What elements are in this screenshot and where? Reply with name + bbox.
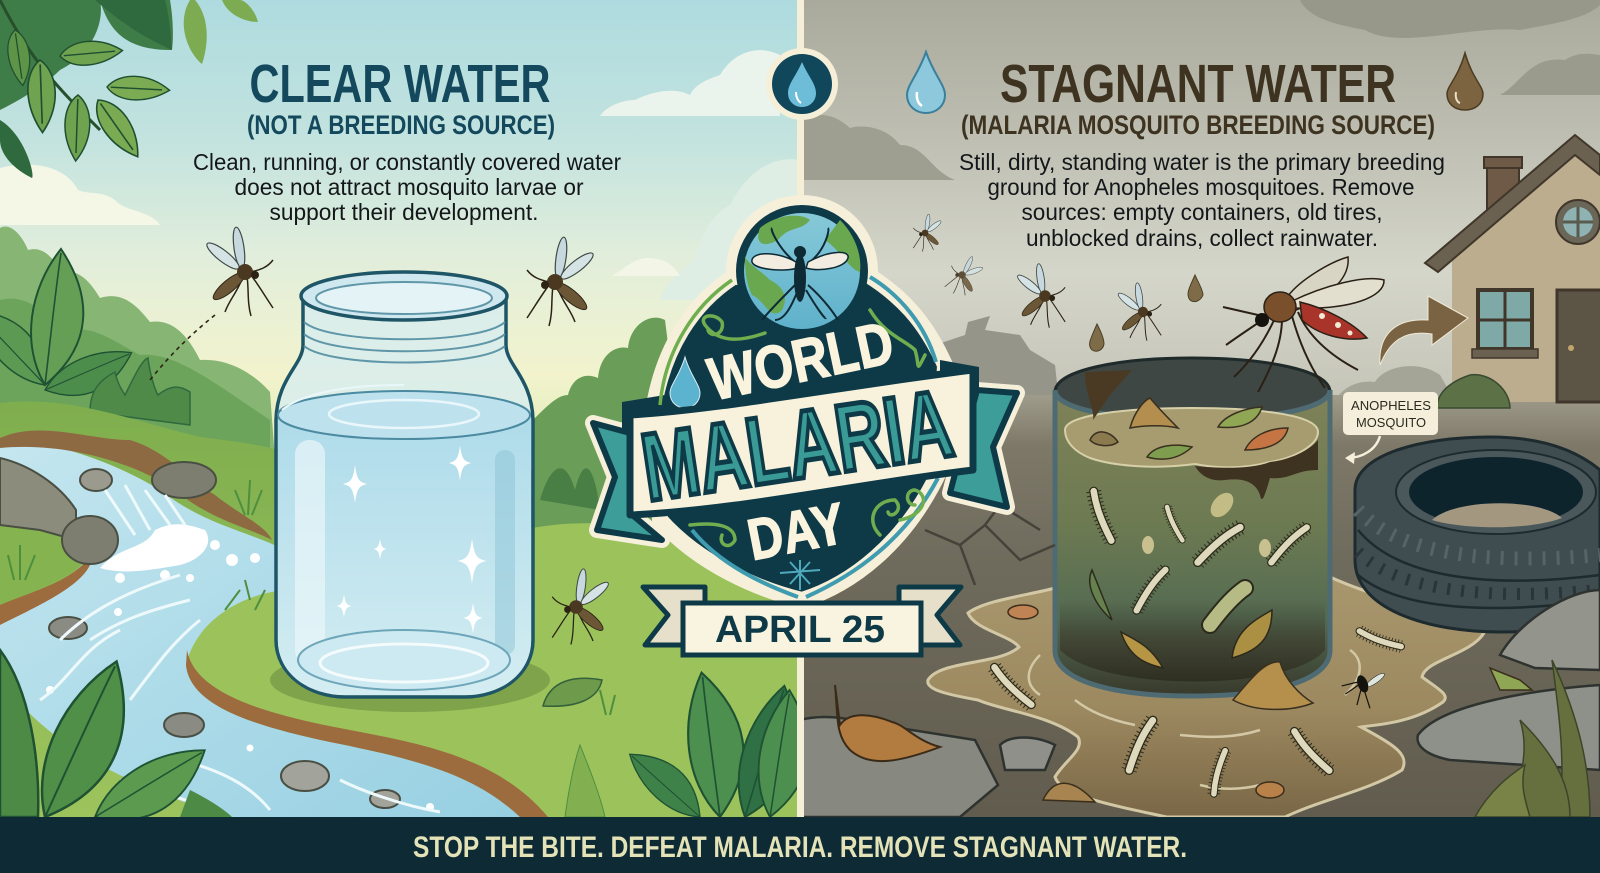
fallen brown leaf (835, 685, 940, 761)
footer slogan: STOP THE BITE. DEFEAT MALARIA. REMOVE STAGNANT WATER. (413, 831, 1187, 864)
barrel with larvae (1055, 358, 1330, 709)
jar shadow (270, 648, 550, 712)
text block: stagnant water description: ground for Anopheles mosquitoes. Remove (988, 174, 1414, 200)
left sky (0, 0, 800, 470)
background bushes left (0, 227, 275, 460)
panel: stagnant water side (800, 0, 1600, 817)
grass hill (0, 401, 800, 817)
sunken leaves (1121, 632, 1163, 668)
label: anopheles mosquito: ANOPHELES (1351, 398, 1431, 413)
small black mosquito (1339, 657, 1393, 713)
rim grime (1195, 440, 1318, 499)
tree branch leaves (0, 0, 258, 178)
rocks (0, 458, 400, 808)
text block: clear water description: does not attract mosquito larvae or (234, 174, 584, 200)
house (1425, 135, 1600, 402)
debris silt (1060, 600, 1325, 682)
right sky (800, 0, 1600, 420)
heading: clear water: CLEAR WATER (250, 54, 550, 114)
larvae in puddle (992, 619, 1401, 794)
ground cracks (925, 505, 1055, 585)
front-right foliage (565, 667, 810, 825)
water surface (1065, 408, 1318, 468)
banner side flaps (622, 360, 979, 430)
label: anopheles mosquito: MOSQUITO (1356, 415, 1426, 430)
barrel rim (1055, 358, 1330, 440)
footer bar (0, 817, 1600, 873)
text block: clear water description: Clean, running, or constantly covered water (193, 149, 621, 175)
text block: stagnant water description (959, 149, 1445, 251)
badge water drop (670, 357, 700, 408)
ribbon tail right (950, 390, 1017, 507)
badge text: day: DAY (742, 491, 850, 573)
bush by house (1437, 375, 1510, 408)
side mosquitoes (913, 214, 1161, 341)
scatter droplets (1090, 275, 1203, 351)
larvae in barrel (1077, 491, 1128, 541)
swirls (690, 310, 925, 545)
left clouds (0, 50, 800, 300)
grass clump (1475, 660, 1590, 817)
grey clouds (804, 0, 1600, 180)
puddle ripples (1029, 650, 1360, 789)
mini mosquito (780, 560, 820, 590)
leafy plants left (0, 249, 190, 425)
date banner (643, 587, 961, 655)
icon: blue drop (907, 52, 945, 113)
chimney (1487, 165, 1519, 220)
world malaria day badge (593, 195, 1017, 655)
text block: stagnant water description: unblocked drains, collect rainwater. (1026, 225, 1378, 251)
badge text: world: WORLD (702, 309, 899, 413)
fallen leaf (543, 678, 602, 706)
subheading: malaria mosquito breeding source: (MALARIA MOSQUITO BREEDING SOURCE) (961, 110, 1435, 140)
icon: centre water drop badge (766, 48, 838, 120)
clay pebbles (1008, 605, 1532, 802)
right meadow (185, 523, 800, 817)
globe mosquito (752, 228, 848, 320)
tire (1355, 437, 1600, 632)
globe (736, 205, 868, 337)
left mosquitoes (150, 227, 611, 644)
grass tufts (8, 480, 615, 715)
banner (630, 370, 973, 515)
badge text: malaria: MALARIA (635, 370, 959, 522)
ground (800, 395, 1600, 817)
floating leaves (1130, 398, 1178, 428)
text block: stagnant water description: sources: empty containers, old tires, (1022, 199, 1382, 225)
jar of clear water (276, 272, 533, 697)
front-left foliage (0, 650, 232, 845)
large malaria mosquito (1223, 257, 1384, 392)
foreground leaf on rim (1233, 662, 1313, 709)
large pale larva (1210, 588, 1245, 625)
icon: brown drop (1447, 53, 1483, 110)
arrow toward house (1380, 296, 1468, 365)
distant junk silhouette (925, 316, 1460, 410)
river bank (186, 650, 548, 817)
rocks (800, 590, 1600, 817)
ribbon tail left (593, 423, 662, 540)
center divider (797, 0, 804, 817)
heading: stagnant water: STAGNANT WATER (1000, 54, 1396, 114)
shield (655, 275, 945, 600)
date banner: APRIL 25 (715, 609, 885, 651)
globe cream backing (726, 195, 878, 347)
left island (0, 505, 92, 605)
text block: clear water description (193, 149, 621, 225)
subheading: not a breeding source: (NOT A BREEDING SOURCE) (247, 110, 555, 140)
text block: clear water description: support their development. (270, 199, 538, 225)
river (0, 438, 520, 817)
puddle (928, 577, 1484, 817)
text block: stagnant water description: Still, dirty, standing water is the primary breeding (959, 149, 1445, 175)
panel: clear water side (0, 0, 810, 845)
water foam and ripples (40, 485, 440, 812)
label: anopheles mosquito (1343, 392, 1438, 464)
shield inner lines (660, 280, 732, 405)
barrel body (1055, 390, 1330, 696)
background bushes right (533, 318, 690, 530)
